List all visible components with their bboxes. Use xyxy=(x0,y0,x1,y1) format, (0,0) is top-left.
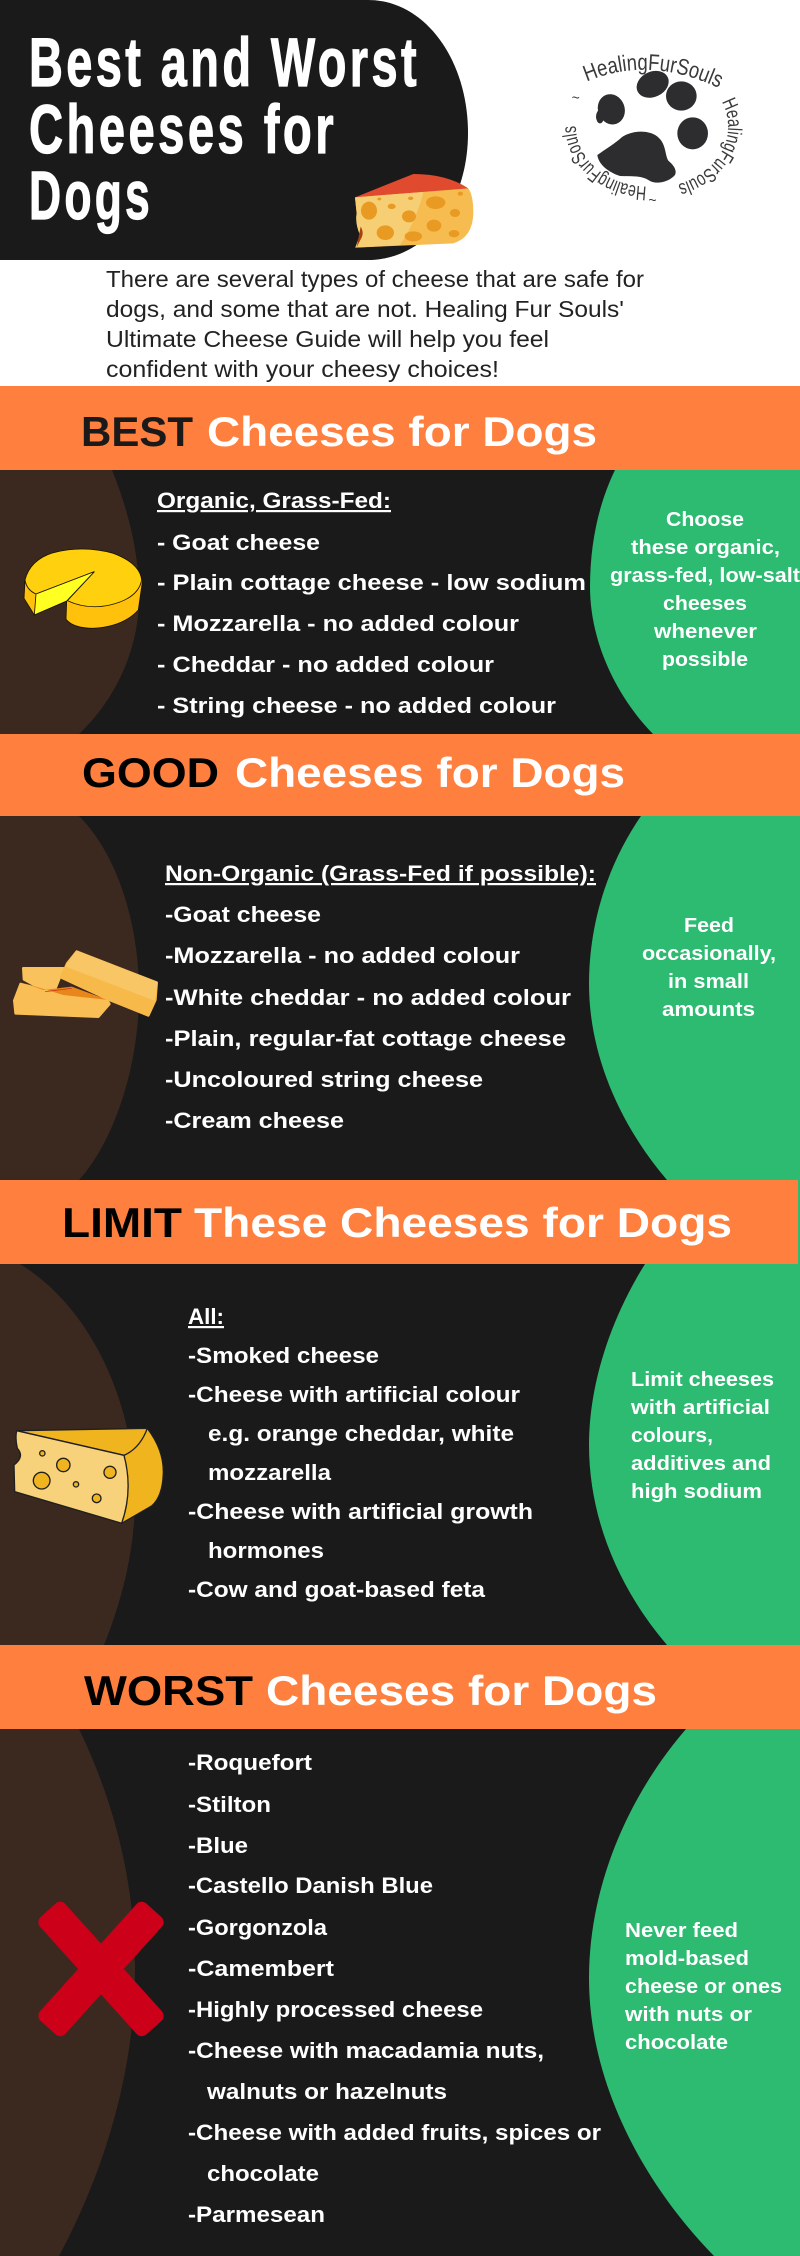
limit advice xyxy=(630,1369,774,1503)
ring text: ~ xyxy=(648,192,656,208)
worst list: chocolate xyxy=(207,2161,319,2186)
worst advice: with nuts or xyxy=(624,2004,752,2026)
good list: -Mozzarella - no added colour xyxy=(165,943,520,968)
panel background xyxy=(0,1729,800,2256)
ring text: HealingFurSouls xyxy=(562,126,646,200)
ring text: ~ xyxy=(572,90,580,106)
icon: cheese wedge with red rind xyxy=(355,174,473,248)
limit list: -Cheese with artificial growth xyxy=(188,1499,533,1524)
brown left shape xyxy=(0,816,139,1180)
best advice xyxy=(610,509,800,671)
intro text: dogs, and some that are not. Healing Fur Souls' xyxy=(106,296,624,322)
good list: -Plain, regular-fat cottage cheese xyxy=(165,1026,566,1051)
icon: swiss cheese wedge xyxy=(14,1428,163,1523)
banner: limit xyxy=(0,1180,800,1264)
good list xyxy=(165,861,596,1133)
intro text: There are several types of cheese that are safe for xyxy=(106,266,644,292)
good advice: Feed xyxy=(684,915,734,937)
title: Best and Worst xyxy=(29,24,420,101)
worst list: -Parmesean xyxy=(188,2202,325,2227)
banner: limit: These Cheeses for Dogs xyxy=(194,1199,732,1246)
best advice: Choose xyxy=(666,509,744,531)
header panel xyxy=(0,0,473,260)
banner: best: BEST xyxy=(81,408,193,455)
banner: limit: LIMIT xyxy=(62,1199,182,1246)
good list: Non-Organic (Grass-Fed if possible): xyxy=(165,861,596,886)
worst list: -Roquefort xyxy=(188,1750,313,1775)
good advice: occasionally, xyxy=(642,943,776,965)
worst advice: cheese or ones xyxy=(625,1976,782,1998)
best list: Organic, Grass-Fed: xyxy=(157,488,391,513)
ring text: HealingFurSouls xyxy=(582,54,722,87)
limit list: e.g. orange cheddar, white xyxy=(208,1421,514,1446)
good advice: amounts xyxy=(662,999,755,1021)
banner: good xyxy=(0,734,800,816)
best list: - Goat cheese xyxy=(157,530,320,555)
best advice: grass-fed, low-salt xyxy=(610,565,800,587)
brown left shape xyxy=(0,1729,135,2256)
panel: good cheeses xyxy=(0,816,800,1180)
title xyxy=(29,24,420,234)
limit advice: with artificial xyxy=(630,1397,770,1419)
limit list: -Smoked cheese xyxy=(188,1343,379,1368)
worst advice: mold-based xyxy=(625,1948,749,1970)
best advice: these organic, xyxy=(631,537,780,559)
banner: worst: WORST xyxy=(84,1667,253,1714)
best advice: possible xyxy=(662,649,748,671)
icon: round cheese with wedge cut xyxy=(24,549,143,628)
green right shape xyxy=(589,1264,800,1645)
green right shape xyxy=(589,1729,800,2256)
worst list: -Gorgonzola xyxy=(188,1915,328,1940)
icon: paw print xyxy=(594,66,708,183)
worst advice: chocolate xyxy=(625,2032,728,2054)
banner: best xyxy=(0,386,800,470)
worst list: -Castello Danish Blue xyxy=(188,1873,433,1898)
best list: - String cheese - no added colour xyxy=(157,693,556,718)
worst list: -Highly processed cheese xyxy=(188,1997,483,2022)
worst list: -Camembert xyxy=(188,1956,335,1981)
intro text xyxy=(106,266,644,382)
limit list: -Cow and goat-based feta xyxy=(188,1577,486,1602)
worst list: -Stilton xyxy=(188,1792,271,1817)
banner: best: Cheeses for Dogs xyxy=(207,408,597,455)
ring text: HealingFurSouls xyxy=(678,97,743,196)
best list xyxy=(157,488,586,718)
limit list: hormones xyxy=(208,1538,324,1563)
banner: good: Cheeses for Dogs xyxy=(235,749,625,796)
black title shape xyxy=(0,0,468,260)
best list: - Mozzarella - no added colour xyxy=(157,611,520,636)
best list: - Cheddar - no added colour xyxy=(157,652,494,677)
title: Cheeses for xyxy=(29,91,337,168)
title: Dogs xyxy=(29,157,153,234)
limit list: -Cheese with artificial colour xyxy=(188,1382,520,1407)
worst list: -Cheese with macadamia nuts, xyxy=(188,2038,544,2063)
green right shape xyxy=(590,470,800,734)
limit advice: colours, xyxy=(631,1425,713,1447)
brown left shape xyxy=(0,470,139,734)
worst advice xyxy=(624,1920,782,2054)
good list: -Goat cheese xyxy=(165,902,321,927)
best advice: cheeses xyxy=(663,593,747,615)
banner: worst: Cheeses for Dogs xyxy=(266,1667,657,1714)
good list: -Uncoloured string cheese xyxy=(165,1067,483,1092)
worst advice: Never feed xyxy=(625,1920,738,1942)
brown left shape xyxy=(0,1264,135,1645)
good list: -White cheddar - no added colour xyxy=(165,985,572,1010)
intro text: Ultimate Cheese Guide will help you feel xyxy=(106,326,549,352)
limit advice: additives and xyxy=(631,1453,771,1475)
ring text xyxy=(562,54,743,208)
panel: worst cheeses xyxy=(0,1729,800,2256)
panel: best cheeses xyxy=(0,470,800,734)
panel background xyxy=(0,470,800,734)
limit list: mozzarella xyxy=(208,1460,332,1485)
panel background xyxy=(0,816,800,1180)
panel background xyxy=(0,1264,800,1645)
worst list: -Cheese with added fruits, spices or xyxy=(188,2120,601,2145)
best list: - Plain cottage cheese - low sodium xyxy=(157,570,586,595)
limit list: All: xyxy=(188,1304,224,1329)
green right shape xyxy=(589,816,800,1180)
good advice: in small xyxy=(668,971,749,993)
icon: red cross xyxy=(36,1899,166,2039)
intro text: confident with your cheesy choices! xyxy=(106,356,499,382)
best advice: whenever xyxy=(653,621,757,643)
good advice xyxy=(642,915,776,1021)
limit advice: high sodium xyxy=(631,1481,762,1503)
logo: Healing Fur Souls paw xyxy=(562,54,743,208)
good list: -Cream cheese xyxy=(165,1108,344,1133)
banner: good: GOOD xyxy=(82,749,219,796)
banner: worst xyxy=(0,1645,800,1729)
worst list: walnuts or hazelnuts xyxy=(206,2079,447,2104)
panel: limit cheeses xyxy=(0,1264,800,1645)
worst list: -Blue xyxy=(188,1833,248,1858)
icon: cheese slabs xyxy=(14,952,157,1017)
limit list xyxy=(188,1304,533,1602)
limit advice: Limit cheeses xyxy=(631,1369,774,1391)
worst list xyxy=(188,1750,601,2227)
